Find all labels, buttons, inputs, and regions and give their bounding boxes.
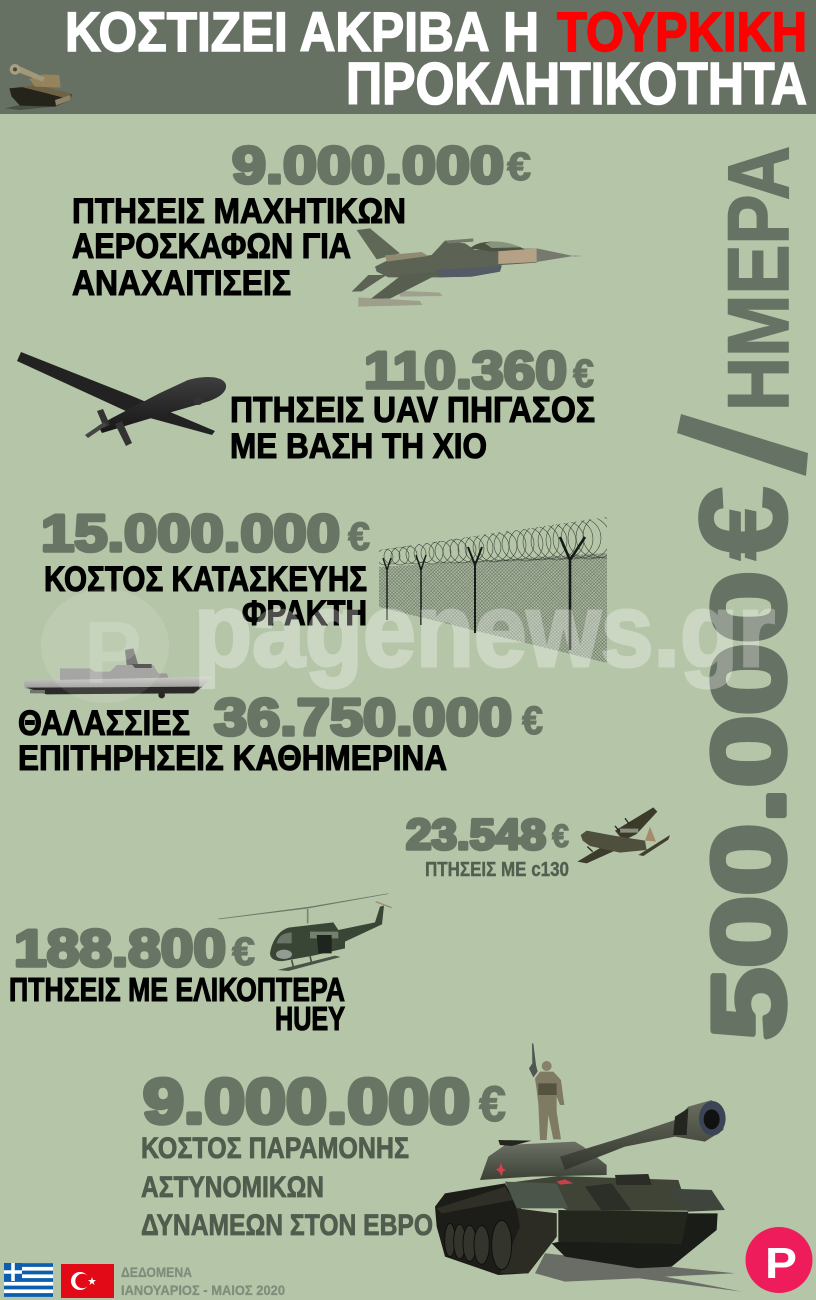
item 4: sea patrols: € bbox=[522, 699, 543, 743]
vertical total: 500.000 € / ΗΜΕΡΑ bbox=[675, 146, 813, 1040]
item 7: police forces at Evros: ΑΣΤΥΝΟΜΙΚΩΝ bbox=[141, 1171, 324, 1204]
item 3: fence cost: ΦΡΑΚΤΗ bbox=[242, 593, 367, 633]
item 5: C130 bbox=[406, 811, 569, 881]
item 6: Huey helicopter: € bbox=[232, 930, 255, 974]
icon: helicopter bbox=[218, 894, 392, 971]
icon: C130 aircraft bbox=[577, 807, 670, 863]
item 2: UAV: ΠΤΗΣΕΙΣ UAV ΠΗΓΑΣΟΣ bbox=[230, 389, 595, 430]
watermark: pagenews.gr: pagenews.gr bbox=[194, 573, 775, 689]
item 1: fighter jets: ΑΝΑΧΑΙΤΙΣΕΙΣ bbox=[72, 263, 291, 303]
icon: fighter jet bbox=[352, 228, 583, 307]
item 6: Huey helicopter bbox=[9, 920, 345, 1037]
item 4: sea patrols: 36.750.000 bbox=[214, 689, 512, 747]
watermark: pagenews.gr bbox=[41, 573, 775, 703]
item 1: fighter jets: € bbox=[507, 145, 531, 189]
item 5: C130: ΠΤΗΣΕΙΣ ΜΕ c130 bbox=[425, 859, 569, 881]
title bbox=[65, 0, 807, 117]
item 1: fighter jets: 9.000.000 bbox=[232, 137, 504, 195]
icon: border fence with razor wire bbox=[379, 517, 607, 663]
item 2: UAV: 110.360 bbox=[364, 342, 567, 400]
vertical total: 500.000 € / ΗΜΕΡΑ: € bbox=[675, 486, 813, 560]
item 1: fighter jets: ΑΕΡΟΣΚΑΦΩΝ ΓΙΑ bbox=[72, 226, 351, 266]
item 3: fence cost bbox=[41, 505, 370, 633]
item 3: fence cost: 15.000.000 bbox=[41, 505, 340, 563]
data source note bbox=[121, 1264, 285, 1298]
item 6: Huey helicopter: HUEY bbox=[275, 1000, 345, 1037]
icon: Turkish flag bbox=[61, 1264, 114, 1298]
item 7: police forces at Evros bbox=[141, 1067, 506, 1242]
item 7: police forces at Evros: ΔΥΝΑΜΕΩΝ ΣΤΟΝ ΕΒΡΟ bbox=[141, 1209, 433, 1242]
item 6: Huey helicopter: 188.800 bbox=[14, 920, 226, 978]
data source note: ΙΑΝΟΥΑΡΙΟΣ - ΜΑΙΟΣ 2020 bbox=[121, 1282, 285, 1298]
icon: UAV drone bbox=[17, 352, 226, 446]
item 3: fence cost: € bbox=[348, 515, 370, 559]
item 5: C130: € bbox=[552, 818, 569, 854]
item 2: UAV: ΜΕ ΒΑΣΗ ΤΗ ΧΙΟ bbox=[230, 426, 487, 466]
item 4: sea patrols bbox=[18, 689, 543, 778]
data source note: ΔΕΔΟΜΕΝΑ bbox=[121, 1264, 192, 1280]
icon: navy ship bbox=[23, 648, 213, 698]
title: ΚΟΣΤΙΖΕΙ ΑΚΡΙΒΑ Η bbox=[65, 0, 539, 63]
item 4: sea patrols: ΕΠΙΤΗΡΗΣΕΙΣ ΚΑΘΗΜΕΡΙΝΑ bbox=[18, 738, 447, 778]
item 7: police forces at Evros: € bbox=[479, 1076, 506, 1132]
item 7: police forces at Evros: 9.000.000 bbox=[143, 1067, 470, 1137]
item 2: UAV: € bbox=[573, 352, 594, 396]
icon: small tank in header bbox=[5, 64, 72, 110]
logo: pagenews badge: P bbox=[765, 1239, 797, 1288]
item 1: fighter jets: ΠΤΗΣΕΙΣ ΜΑΧΗΤΙΚΩΝ bbox=[72, 191, 406, 231]
vertical total: 500.000 € / ΗΜΕΡΑ: ΗΜΕΡΑ bbox=[711, 146, 807, 411]
icon: tank with soldier bbox=[435, 1043, 742, 1292]
item 7: police forces at Evros: ΚΟΣΤΟΣ ΠΑΡΑΜΟΝΗΣ bbox=[141, 1132, 409, 1165]
vertical total: 500.000 € / ΗΜΕΡΑ: 500.000 bbox=[691, 571, 806, 1040]
watermark: pagenews.gr: P bbox=[84, 603, 142, 702]
header band bbox=[0, 0, 816, 114]
item 1: fighter jets bbox=[72, 137, 531, 303]
logo: pagenews badge bbox=[746, 1227, 812, 1293]
item 5: C130: 23.548 bbox=[406, 811, 546, 859]
item 3: fence cost: ΚΟΣΤΟΣ ΚΑΤΑΣΚΕΥΗΣ bbox=[44, 559, 367, 599]
item 4: sea patrols: ΘΑΛΑΣΣΙΕΣ bbox=[18, 703, 190, 743]
item 2: UAV bbox=[230, 342, 595, 466]
icon: Greek flag bbox=[4, 1263, 53, 1296]
item 6: Huey helicopter: ΠΤΗΣΕΙΣ ΜΕ ΕΛΙΚΟΠΤΕΡΑ bbox=[9, 971, 345, 1008]
